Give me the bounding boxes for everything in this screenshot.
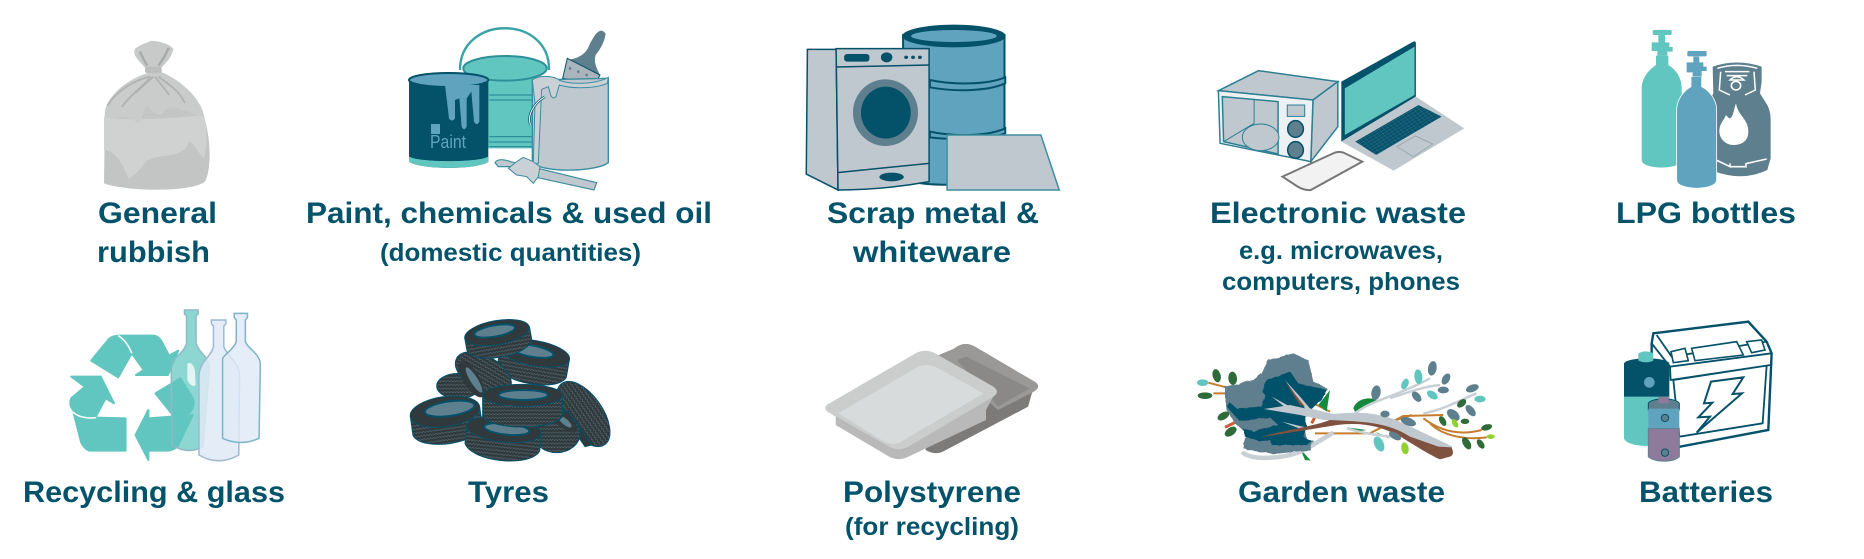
icon: microwave, laptop and phone	[1218, 41, 1464, 190]
panel: garden waste	[1197, 353, 1495, 509]
label: paint, chemicals and used oil: Paint, chemicals & used oil	[306, 197, 712, 230]
label: LPG bottles: LPG bottles	[1616, 197, 1796, 230]
icon: polystyrene trays	[825, 344, 1038, 459]
icon: rubbish bag	[104, 41, 210, 190]
icon: washing machine, drum and metal sheet	[806, 25, 1059, 190]
panel: general rubbish	[97, 41, 217, 269]
panel: electronic waste	[1210, 41, 1466, 296]
label: for recycling: (for recycling)	[845, 513, 1019, 541]
label: example microwaves: e.g. microwaves,	[1239, 237, 1443, 265]
icon: recycling symbol and glass bottles	[70, 310, 260, 461]
icon: paint cans	[409, 28, 608, 190]
panel: batteries	[1624, 322, 1773, 509]
label: electronic waste: Electronic waste	[1210, 197, 1466, 230]
icon: gas cylinders	[1642, 30, 1771, 188]
label: general: General	[98, 197, 217, 230]
icon: car battery and cells	[1624, 322, 1772, 461]
label: garden waste: Garden waste	[1238, 476, 1445, 509]
label: domestic quantities: (domestic quantities)	[380, 239, 641, 267]
label: tyres: Tyres	[468, 476, 549, 509]
label: polystyrene: Polystyrene	[843, 476, 1021, 509]
label: computers and phones: computers, phones	[1222, 268, 1460, 296]
label: whiteware: whiteware	[852, 236, 1011, 269]
icon: tyre pile	[408, 315, 621, 464]
panel: scrap metal and whiteware	[806, 25, 1059, 269]
panel: tyres	[408, 315, 621, 509]
panel: paint, chemicals and used oil	[306, 28, 712, 267]
panel: LPG bottles	[1616, 30, 1796, 230]
label: batteries: Batteries	[1639, 476, 1773, 509]
icon: branches and foliage	[1197, 353, 1495, 461]
label: scrap metal: Scrap metal &	[827, 197, 1039, 230]
panel: recycling and glass	[23, 310, 285, 509]
label: recycling and glass: Recycling & glass	[23, 476, 285, 509]
panel: polystyrene	[825, 344, 1038, 541]
text: paint tin label: Paint	[430, 132, 466, 152]
label: rubbish: rubbish	[97, 236, 210, 269]
